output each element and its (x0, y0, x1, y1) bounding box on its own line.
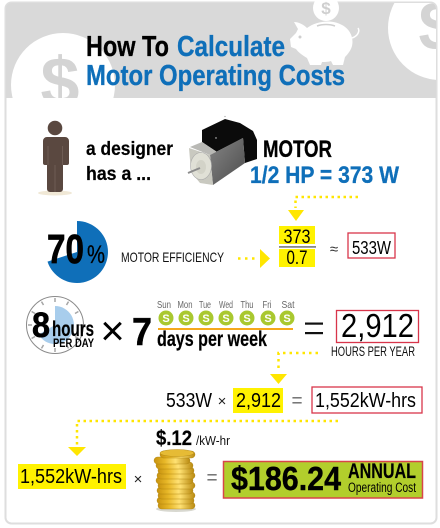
week calendar: days per week (157, 328, 267, 351)
icon: dollar coin right (388, 3, 436, 80)
equals sign (305, 322, 323, 334)
week calendar (157, 299, 295, 351)
equation: 533W times 2,912: 533W (166, 390, 212, 412)
equation: 533W times 2,912: = (291, 391, 303, 412)
fraction: 373 over 0.7 (279, 226, 316, 269)
week calendar: Mon (178, 299, 193, 311)
week calendar: S (222, 313, 230, 325)
result: annual operating cost: $186.24 (231, 460, 342, 497)
arrow: efficiency to fraction (238, 249, 270, 268)
result: 2,912 hours per year: 2,912 (341, 307, 414, 344)
week calendar: S (283, 313, 291, 325)
icon: clock 8 hours per day: 8 (32, 306, 50, 345)
equation: 533W times 2,912: 2,912 (236, 390, 281, 412)
week calendar: S (182, 313, 190, 325)
week calendar: S (264, 313, 272, 325)
week calendar: Wed (219, 299, 233, 311)
motor label (250, 136, 399, 189)
arrow: kW-hrs to final equation (68, 421, 338, 456)
fraction: 373 over 0.7: 373 (284, 227, 310, 248)
week calendar: Fri (262, 299, 272, 311)
arrow: hours to second equation (270, 353, 318, 384)
week calendar: Tue (199, 299, 211, 311)
week calendar: S (162, 313, 170, 325)
motor label: 1/2 HP = 373 W (250, 162, 399, 189)
fraction: 373 over 0.7: 0.7 (286, 248, 308, 269)
multiply sign: × (100, 307, 125, 354)
week calendar: Sun (157, 299, 171, 311)
text: a designer has a: a designer (86, 138, 173, 160)
text: a designer has a: has a ... (86, 163, 151, 185)
chart: 70% pie (47, 221, 108, 283)
motor label: MOTOR (263, 136, 332, 163)
approx sign: ≈ (330, 241, 338, 258)
result: annual operating cost (224, 460, 422, 498)
icon: clock 8 hours per day (26, 296, 94, 354)
highlighted: 1,552kW-hrs: 1,552kW-hrs (20, 466, 122, 488)
icon: clock 8 hours per day: PER DAY (53, 336, 94, 350)
result: annual operating cost: Operating Cost (348, 480, 416, 495)
result: 533W: 533W (352, 237, 391, 258)
title: How To (86, 31, 169, 63)
title (86, 31, 345, 92)
label: motor efficiency: MOTOR EFFICIENCY (121, 249, 224, 265)
week calendar: S (243, 313, 251, 325)
title: Motor Operating Costs (86, 60, 345, 92)
equation: 533W times 2,912 (166, 388, 303, 413)
price per kW-hr: $.12 (156, 427, 192, 450)
icon: clock 8 hours per day: hours (52, 318, 94, 341)
number: 7: 7 (132, 311, 152, 354)
week calendar: Sat (282, 299, 295, 311)
icon: person (38, 121, 72, 196)
week calendar: S (202, 313, 210, 325)
result: 2,912 hours per year (331, 307, 418, 359)
multiply sign: × (134, 471, 142, 488)
title: Calculate (177, 31, 285, 63)
result: annual operating cost: ANNUAL (348, 460, 416, 483)
equation: 533W times 2,912: × (218, 393, 226, 410)
week calendar: Thu (240, 299, 254, 311)
panel: header banner (6, 2, 436, 98)
result: 1,552kW-hrs: 1,552kW-hrs (315, 390, 416, 412)
icon: dollar coin left: $ (41, 43, 79, 121)
equals sign: = (206, 468, 218, 489)
price per kW-hr (156, 427, 231, 450)
price per kW-hr: /kW-hr (196, 433, 231, 448)
icon: piggy bank with coin (290, 0, 359, 65)
arrow: motor to fraction (288, 197, 358, 221)
text: a designer has a (86, 138, 173, 185)
icon: motor (188, 116, 257, 185)
chart: 70% pie: 70 (47, 226, 84, 272)
icon: dollar coin left (11, 33, 115, 98)
chart: 70% pie: % (87, 241, 105, 269)
icon: coin stack (154, 450, 196, 512)
